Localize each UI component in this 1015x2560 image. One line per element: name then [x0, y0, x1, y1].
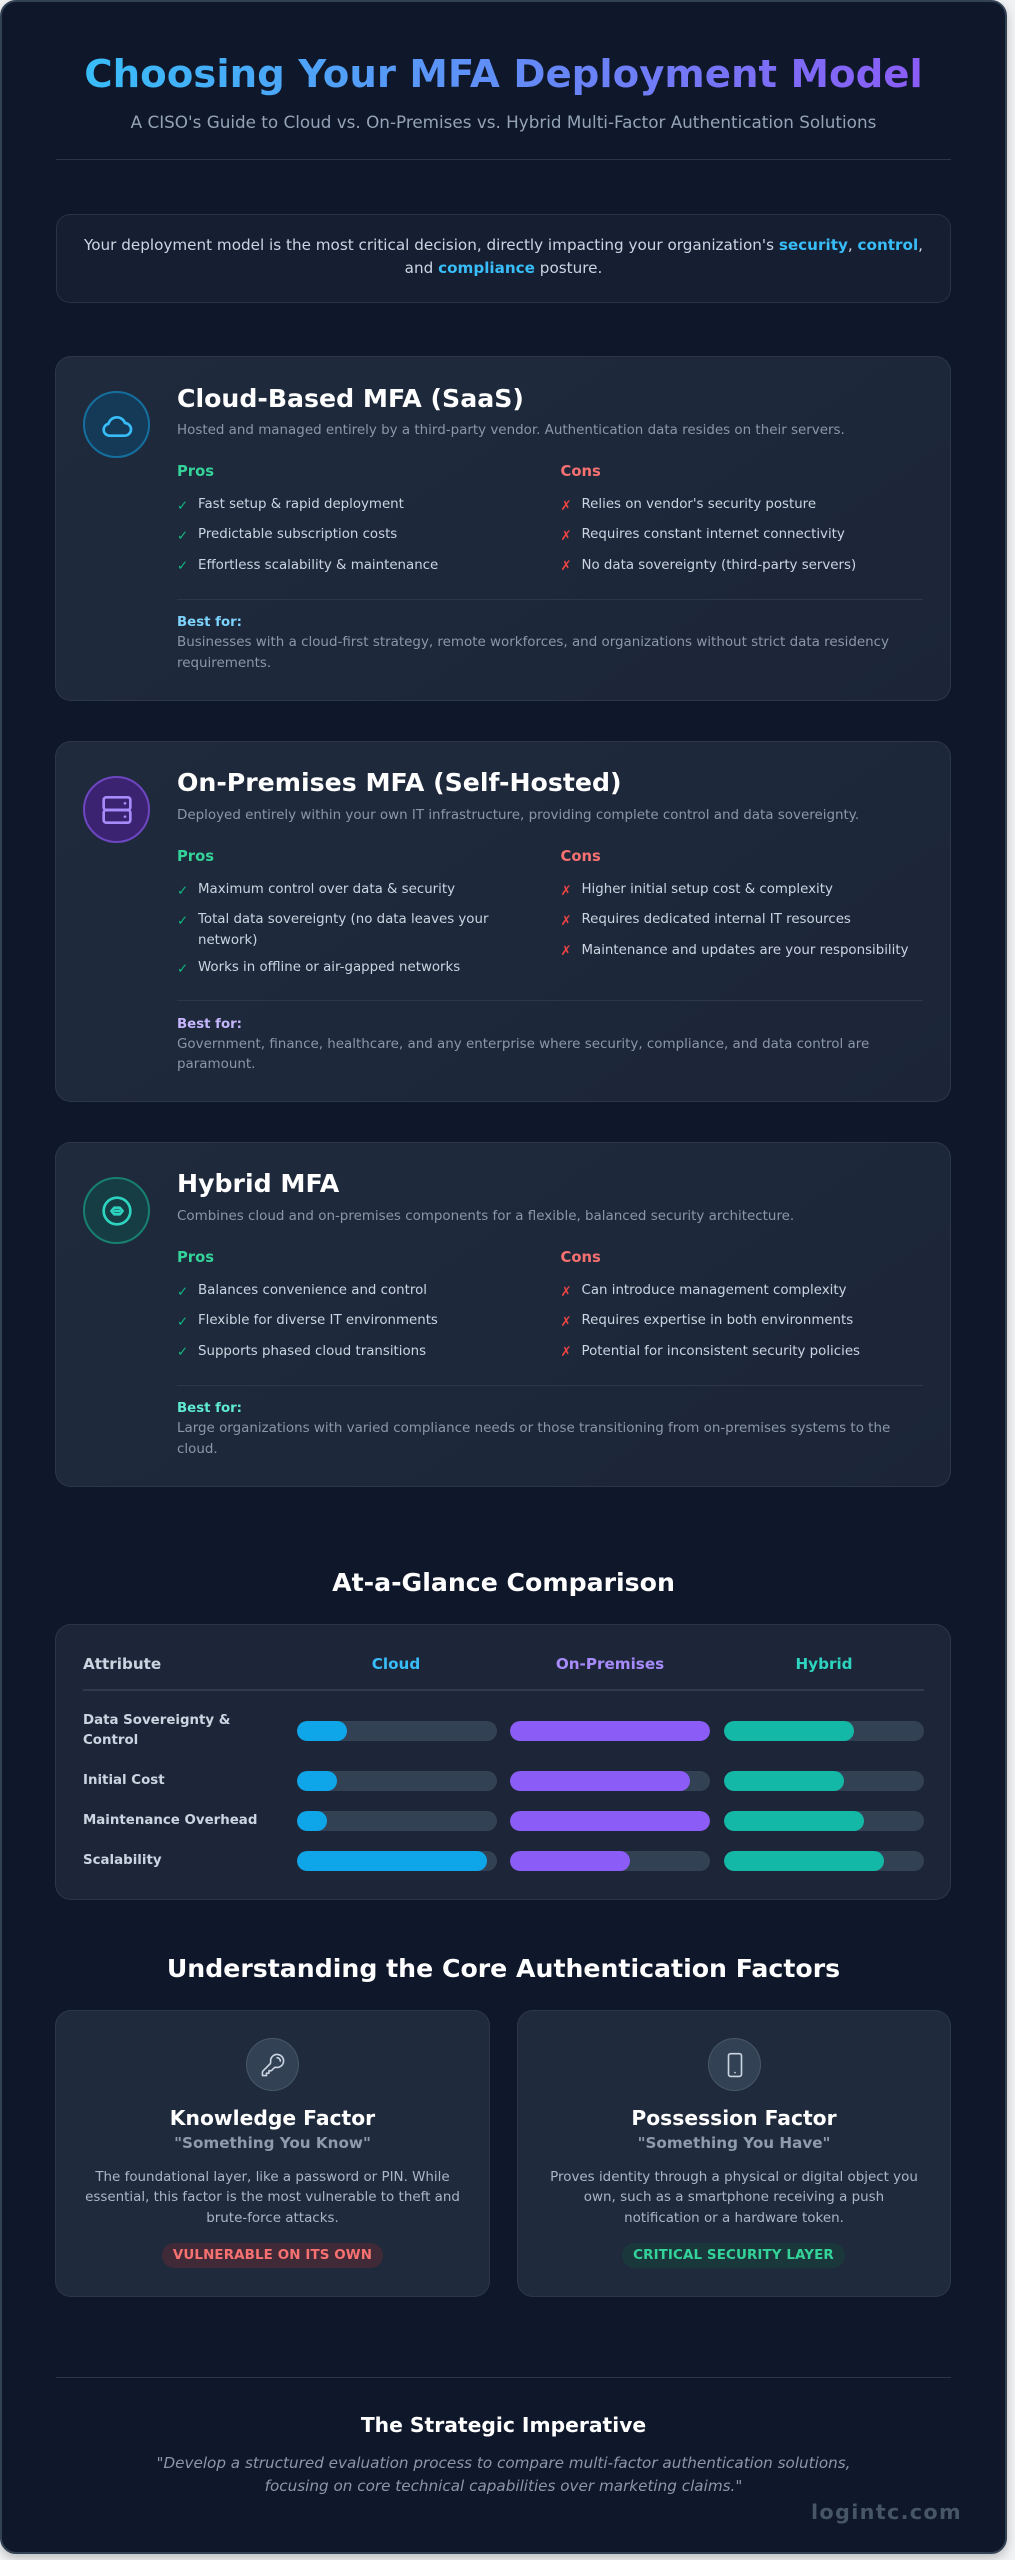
badge: VULNERABLE ON ITS OWN	[173, 2248, 372, 2263]
pros list: Pros	[177, 463, 214, 480]
quote: focusing on core technical capabilities over marketing claims."	[265, 2477, 742, 2495]
cons list	[560, 463, 856, 574]
cons list: Cons	[560, 1249, 601, 1266]
cons list	[560, 848, 909, 959]
pros list: ✓	[177, 1285, 188, 1300]
pros list: ✓	[177, 1345, 188, 1360]
table header	[83, 1655, 924, 1691]
table header: On-Premises	[556, 1655, 664, 1673]
icon: server	[83, 776, 150, 843]
cons list: Can introduce management complexity	[582, 1283, 846, 1298]
cons list: ✗	[560, 559, 572, 574]
heading: core factors: Understanding the Core Authentication Factors	[167, 1954, 840, 1983]
panel: comparison table	[55, 1624, 951, 1900]
cons list: ✗	[560, 944, 572, 959]
factor tagline: "Something You Know"	[174, 2134, 371, 2152]
pros list	[177, 848, 488, 977]
cons list: Higher initial setup cost & complexity	[582, 882, 833, 897]
quote: "Develop a structured evaluation process to compare multi-factor authentication solutions,	[156, 2454, 851, 2472]
pros list: ✓	[177, 499, 188, 514]
factor tagline: "Something You Have"	[638, 2134, 830, 2152]
icon: phone	[708, 2038, 761, 2091]
description: Combines cloud and on-premises components for a flexible, balanced security architecture.	[177, 1209, 794, 1224]
cons list: Requires dedicated internal IT resources	[582, 912, 851, 927]
factor description: notification or a hardware token.	[624, 2211, 844, 2226]
cons list: ✗	[560, 529, 572, 544]
best for: cloud.	[177, 1442, 218, 1457]
cons list: No data sovereignty (third-party servers)	[582, 558, 856, 573]
quote	[156, 2454, 851, 2495]
best for: Best for:	[177, 1016, 242, 1032]
cons list	[560, 1249, 860, 1360]
factor description: brute-force attacks.	[206, 2211, 339, 2226]
table header: Hybrid	[795, 1655, 853, 1673]
pros list: ✓	[177, 559, 188, 574]
cons list: Requires expertise in both environments	[582, 1313, 853, 1328]
factor description	[85, 2170, 460, 2226]
cons list: Relies on vendor's security posture	[582, 497, 816, 512]
cons list: ✗	[560, 1285, 572, 1300]
best for: Government, finance, healthcare, and any enterprise where security, compliance, and data control are	[177, 1037, 869, 1052]
pros list: ✓	[177, 884, 188, 899]
cons list: Cons	[560, 848, 601, 865]
row: scalability	[83, 1851, 924, 1871]
cons list: ✗	[560, 1315, 572, 1330]
pros list: Maximum control over data & security	[198, 882, 455, 897]
row: scalability: Scalability	[83, 1852, 162, 1868]
cons list: ✗	[560, 1345, 572, 1360]
cons list: ✗	[560, 499, 572, 514]
best for: Best for:	[177, 1401, 242, 1416]
best for: Businesses with a cloud-first strategy, remote workforces, and organizations without strict data residency	[177, 635, 889, 650]
row: maintenance overhead: Maintenance Overhead	[83, 1812, 257, 1828]
best for: paramount.	[177, 1057, 255, 1072]
pros list: network)	[198, 933, 257, 948]
panel: intro callout: and compliance posture.	[405, 259, 602, 277]
icon: key	[246, 2038, 299, 2091]
best for	[177, 1016, 869, 1072]
pros list: Supports phased cloud transitions	[198, 1344, 426, 1359]
best for: requirements.	[177, 656, 271, 671]
subtitle: A CISO's Guide to Cloud vs. On-Premises vs. Hybrid Multi-Factor Authentication Solutions	[131, 112, 876, 132]
panel: knowledge factor	[55, 2010, 490, 2297]
cons list: Maintenance and updates are your responsibility	[582, 943, 909, 958]
cons list: ✗	[560, 914, 572, 929]
icon: cloud	[83, 391, 150, 458]
cons list: Potential for inconsistent security policies	[582, 1344, 860, 1359]
row: data sovereignty: Control	[83, 1733, 138, 1748]
heading: On-Premises MFA (Self-Hosted)	[177, 768, 622, 797]
pros list: ✓	[177, 1315, 188, 1330]
pros list: Flexible for diverse IT environments	[198, 1313, 438, 1328]
title: Choosing Your MFA Deployment Model	[84, 52, 923, 97]
watermark: logintc.com	[811, 2500, 962, 2524]
pros list: Works in offline or air-gapped networks	[198, 960, 460, 975]
pros list: Fast setup & rapid deployment	[198, 497, 404, 512]
factor description: own, such as a smartphone receiving a push	[584, 2190, 884, 2205]
panel: cloud-based MFA	[55, 356, 951, 701]
factor description: Proves identity through a physical or digital object you	[550, 2170, 918, 2185]
panel: possession factor	[517, 2010, 951, 2297]
cons list: ✗	[560, 884, 572, 899]
panel: hybrid MFA	[55, 1142, 951, 1487]
factor title: Knowledge Factor	[170, 2106, 375, 2130]
cons list: Requires constant internet connectivity	[582, 527, 845, 542]
panel: intro callout	[56, 214, 951, 303]
pros list	[177, 1249, 438, 1360]
row: data sovereignty	[83, 1712, 924, 1748]
factor description: essential, this factor is the most vulnerable to theft and	[85, 2190, 460, 2205]
badge: CRITICAL SECURITY LAYER	[633, 2248, 834, 2263]
factor title: Possession Factor	[631, 2106, 837, 2130]
heading: Hybrid MFA	[177, 1169, 339, 1198]
row: data sovereignty: Data Sovereignty &	[83, 1712, 230, 1728]
pros list: Effortless scalability & maintenance	[198, 558, 438, 573]
row: initial cost	[83, 1771, 924, 1791]
icon: hybrid	[83, 1177, 150, 1244]
best for: Best for:	[177, 615, 242, 630]
description: Deployed entirely within your own IT infrastructure, providing complete control and data sovereignty.	[177, 808, 859, 823]
table header: Cloud	[372, 1655, 420, 1673]
badge	[622, 2243, 845, 2268]
pros list: Balances convenience and control	[198, 1283, 427, 1298]
best for: Large organizations with varied compliance needs or those transitioning from on-premises systems to the	[177, 1421, 890, 1436]
pros list: Predictable subscription costs	[198, 527, 397, 542]
factor description	[550, 2170, 918, 2226]
description: Hosted and managed entirely by a third-party vendor. Authentication data resides on their servers.	[177, 423, 845, 438]
row: maintenance overhead	[83, 1811, 924, 1831]
pros list	[177, 463, 438, 574]
factor description: The foundational layer, like a password or PIN. While	[95, 2170, 450, 2185]
panel: intro callout: Your deployment model is the most critical decision, directly impacting your organization's security, control,	[84, 236, 923, 254]
panel: on-premises MFA	[55, 741, 951, 1102]
heading: Cloud-Based MFA (SaaS)	[177, 384, 524, 413]
best for	[177, 615, 889, 671]
pros list: Total data sovereignty (no data leaves your	[198, 912, 488, 927]
pros list: Pros	[177, 848, 214, 865]
badge	[162, 2243, 383, 2268]
pros list: ✓	[177, 529, 188, 544]
pros list: ✓	[177, 962, 188, 977]
pros list: Pros	[177, 1249, 214, 1266]
cons list: Cons	[560, 463, 601, 480]
heading: strategic imperative: The Strategic Imperative	[361, 2412, 646, 2436]
best for	[177, 1401, 890, 1457]
heading: comparison: At-a-Glance Comparison	[332, 1568, 675, 1597]
table header: Attribute	[83, 1655, 161, 1673]
row: initial cost: Initial Cost	[83, 1772, 165, 1788]
pros list: ✓	[177, 914, 188, 929]
